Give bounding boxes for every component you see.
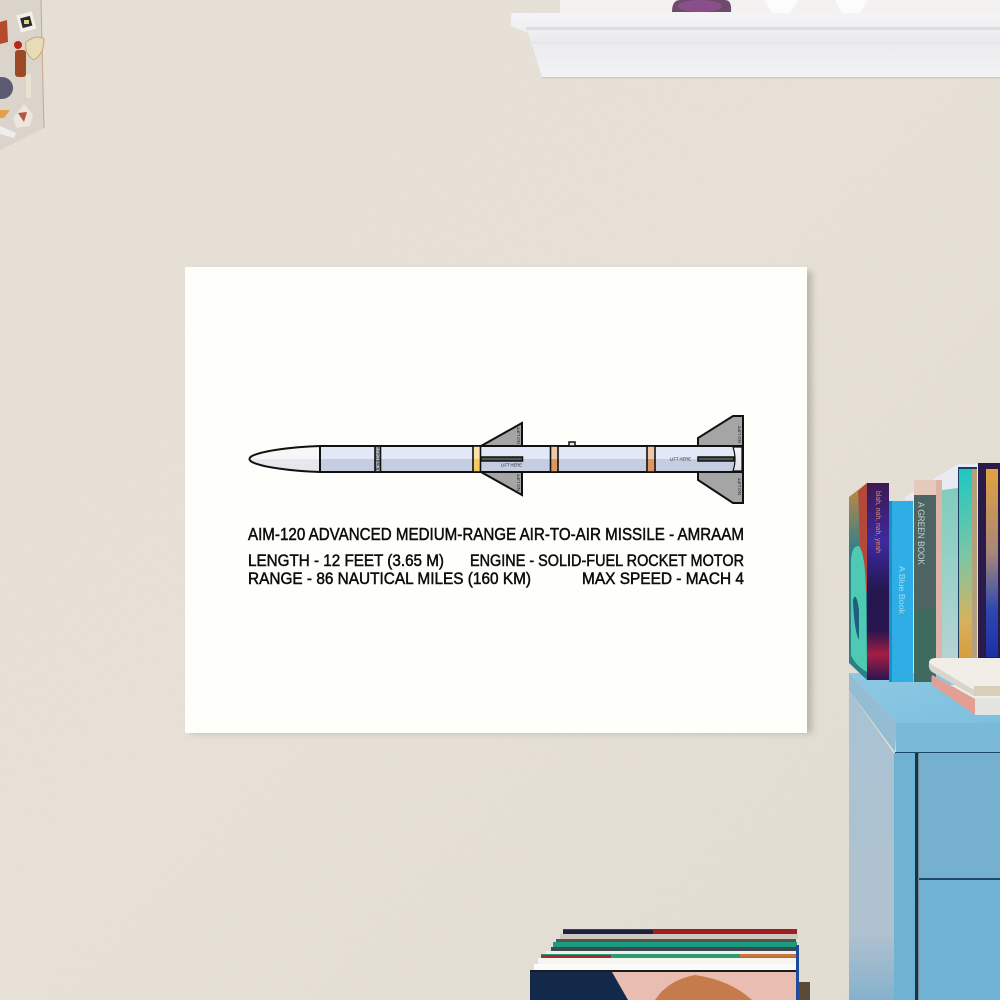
record stack: [530, 929, 810, 1000]
cabinet: [849, 673, 1000, 1000]
colourful book: [849, 483, 889, 680]
wall shelf with ornaments: [511, 0, 1000, 78]
dark band with label: LIFT HERE: [376, 447, 380, 471]
purple book: [978, 463, 1000, 659]
lift here label mid: LIFT HERE: [501, 462, 522, 468]
teal book: [942, 488, 958, 659]
title: AIM-120 ADVANCED MEDIUM-RANGE AIR-TO-AIR MISSILE - AMRAAM: [248, 524, 744, 544]
spec: length: LENGTH - 12 FEET (3.65 M): [248, 552, 444, 570]
blue book: A Blue Book: [897, 566, 906, 615]
missile body: [320, 446, 743, 472]
green book: [914, 495, 936, 682]
yellow band: [473, 446, 480, 472]
spec: range: RANGE - 86 NAUTICAL MILES (160 KM): [248, 570, 531, 588]
lower mid fin: [481, 472, 522, 495]
lower rear fin: [698, 472, 743, 503]
missile diagram: [250, 416, 743, 503]
nose cone: [250, 446, 320, 472]
upper mid fin: [481, 423, 522, 446]
poster shadow: [191, 271, 812, 733]
green book: A GREEN BOOK: [916, 502, 926, 565]
mid wing slot: [481, 457, 522, 461]
lower mid fin: NO LIFT: [516, 473, 521, 491]
pennant with pins: [0, 0, 44, 150]
colourful book: blah, nah, nah, yeah: [874, 491, 881, 553]
lift here label rear: LIFT HERE: [670, 456, 691, 462]
small stacked books: [929, 658, 1000, 715]
rear tail cap: [733, 447, 742, 471]
books: [849, 463, 1000, 715]
spec: engine: ENGINE - SOLID-FUEL ROCKET MOTOR: [470, 552, 744, 570]
poster sheet: [185, 267, 807, 733]
rear fin slot: [698, 457, 734, 461]
white book jacket behind: [905, 464, 978, 500]
upper rear fin: NO LIFT: [737, 425, 742, 443]
spec: max speed: MAX SPEED - MACH 4: [582, 570, 744, 588]
orange band 2: [647, 446, 655, 472]
upper rear fin: [698, 416, 743, 446]
lower rear fin: NO LIFT: [737, 477, 742, 495]
pink book: [914, 480, 942, 510]
gradient book: [958, 467, 977, 659]
launch lug: [569, 442, 575, 446]
upper mid fin: NO LIFT: [516, 426, 521, 444]
orange band 1: [550, 446, 558, 472]
blue book: [889, 501, 913, 682]
